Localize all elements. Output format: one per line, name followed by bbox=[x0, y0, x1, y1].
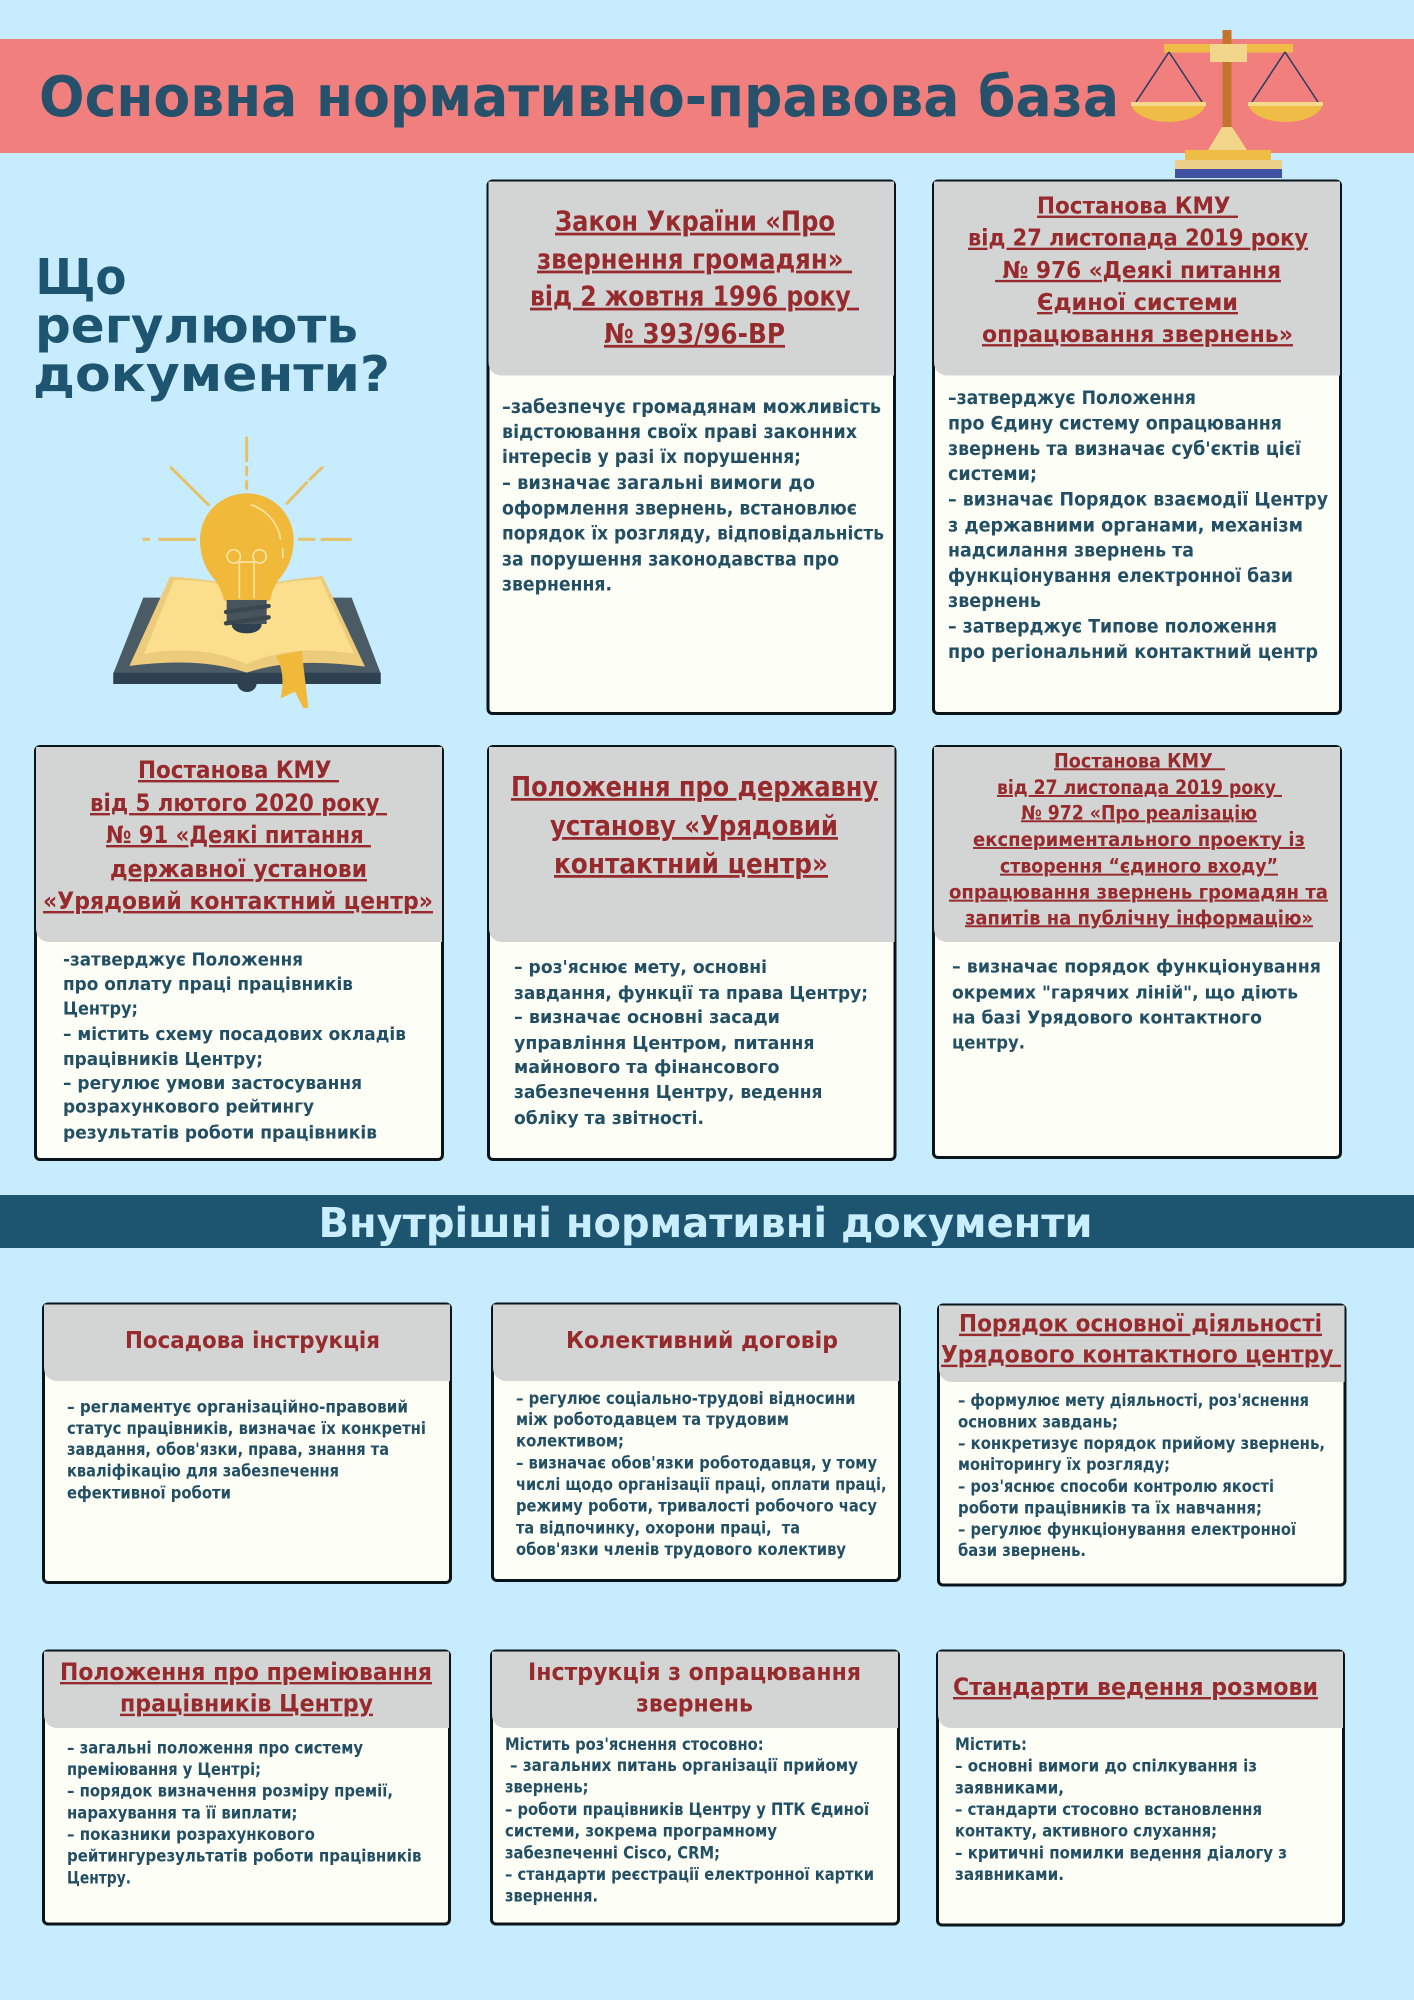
panel: job description bbox=[42, 1302, 452, 1584]
card text bbox=[948, 387, 1329, 663]
card body background bbox=[493, 1652, 897, 1922]
card frame bbox=[42, 1302, 452, 1584]
card frame bbox=[34, 745, 444, 1161]
card frame bbox=[487, 745, 896, 1161]
card text: заявниками, bbox=[955, 1778, 1064, 1797]
card text: звернення. bbox=[505, 1887, 598, 1906]
card text: Центру; bbox=[63, 998, 138, 1019]
card heading bbox=[941, 1310, 1341, 1369]
card body background bbox=[490, 182, 893, 712]
card text bbox=[958, 1391, 1325, 1560]
card heading: від 27 листопада 2019 року bbox=[968, 224, 1308, 252]
card text: – порядок визначення розміру премії, bbox=[67, 1782, 393, 1801]
card text: оформлення звернень, встановлює bbox=[502, 498, 857, 520]
card text: за порушення законодавства про bbox=[502, 548, 839, 570]
card text: бази звернень. bbox=[958, 1541, 1086, 1560]
card heading: Положення про державну bbox=[511, 771, 878, 803]
card heading: від 27 листопада 2019 року bbox=[997, 776, 1282, 799]
card frame bbox=[490, 1650, 900, 1926]
card heading: Посадова інструкція bbox=[125, 1328, 380, 1354]
card heading bbox=[511, 771, 878, 880]
card heading: створення “єдиного входу” bbox=[1000, 855, 1278, 878]
card text: – містить схему посадових окладів bbox=[63, 1024, 406, 1045]
panel: bonus regulation bbox=[42, 1650, 451, 1926]
card text bbox=[63, 950, 406, 1143]
card header bbox=[934, 182, 1340, 376]
panel: appeals processing instruction bbox=[490, 1650, 900, 1926]
card text: – формулює мету діяльності, роз'яснення bbox=[958, 1391, 1309, 1410]
card frame bbox=[486, 180, 896, 715]
card text: – визначає порядок функціонування bbox=[952, 957, 1321, 978]
card heading: «Урядовий контактний центр» bbox=[43, 887, 433, 915]
card heading: державної установи bbox=[110, 855, 367, 883]
card text: –забезпечує громадянам можливість bbox=[502, 396, 881, 418]
card heading: працівників Центру bbox=[120, 1690, 373, 1718]
heading: what do documents regulate: документи? bbox=[33, 346, 390, 403]
card text: рейтингурезультатів роботи працівників bbox=[67, 1847, 422, 1866]
panel: law on citizens' appeals bbox=[486, 180, 896, 715]
card frame bbox=[932, 180, 1342, 715]
card text: – затверджує Типове положення bbox=[948, 616, 1277, 638]
card text: статус працівників, визначає їх конкретні bbox=[67, 1419, 426, 1438]
card body background bbox=[45, 1652, 448, 1922]
card text: – регулює умови застосування bbox=[63, 1073, 362, 1094]
card heading: Закон України «Про bbox=[555, 206, 835, 238]
card text: – роз'яснює способи контролю якості bbox=[958, 1477, 1274, 1496]
card text: окремих "гарячих ліній", що діють bbox=[952, 982, 1298, 1003]
card heading: Порядок основної діяльності bbox=[959, 1310, 1322, 1338]
card header bbox=[939, 1306, 1344, 1382]
card header bbox=[492, 1652, 898, 1728]
card text bbox=[516, 1389, 886, 1559]
card text: порядок їх розгляду, відповідальність bbox=[502, 523, 884, 545]
card text bbox=[67, 1738, 422, 1887]
card header bbox=[938, 1652, 1343, 1728]
card heading: звернень bbox=[636, 1690, 753, 1718]
card heading: № 91 «Деякі питання bbox=[106, 821, 371, 849]
card text: числі щодо організації праці, оплати праці, bbox=[516, 1475, 886, 1494]
card text: – регламентує організаційно-правовий bbox=[67, 1397, 408, 1416]
card text: -затверджує Положення bbox=[63, 950, 303, 971]
card heading: № 976 «Деякі питання bbox=[995, 256, 1281, 284]
card frame bbox=[937, 1304, 1346, 1586]
panel: resolution 91 bbox=[34, 745, 444, 1161]
card text: – критичні помилки ведення діалогу з bbox=[955, 1843, 1287, 1862]
card body background bbox=[935, 748, 1339, 1156]
card text: системи; bbox=[948, 463, 1037, 485]
card text: відстоювання своїх праві законних bbox=[502, 421, 857, 443]
card text: про регіональний контактний центр bbox=[948, 641, 1318, 663]
card text: моніторингу їх розгляду; bbox=[958, 1455, 1170, 1474]
card text: про Єдину систему опрацювання bbox=[948, 413, 1282, 435]
card text: обліку та звітності. bbox=[514, 1108, 704, 1129]
card heading: Колективний договір bbox=[566, 1328, 838, 1354]
card frame bbox=[936, 1650, 1345, 1926]
card text bbox=[952, 957, 1321, 1053]
card text: обов'язки членів трудового колективу bbox=[516, 1540, 846, 1559]
panel: conversation standards bbox=[936, 1650, 1345, 1926]
card text: Містить: bbox=[955, 1735, 1027, 1754]
card body background bbox=[939, 1652, 1342, 1924]
card heading: Постанова КМУ bbox=[138, 756, 339, 784]
card text: надсилання звернень та bbox=[948, 539, 1194, 561]
card body background bbox=[45, 1306, 449, 1581]
card text: нарахування та її виплати; bbox=[67, 1803, 298, 1822]
card heading: Урядового контактного центру bbox=[941, 1341, 1341, 1369]
card text: між роботодавцем та трудовим bbox=[516, 1410, 789, 1429]
card heading: від 5 лютого 2020 року bbox=[90, 789, 387, 817]
card text: звернень; bbox=[505, 1778, 588, 1797]
panel: regulation on the government contact centre bbox=[487, 745, 896, 1161]
card heading: від 2 жовтня 1996 року bbox=[530, 281, 859, 313]
card heading bbox=[949, 749, 1328, 929]
heading: what do documents regulate: Що bbox=[36, 249, 126, 306]
card text: ефективної роботи bbox=[67, 1483, 231, 1502]
card text: – загальних питань організації прийому bbox=[510, 1756, 858, 1775]
card text: – стандарти реєстрації електронної картки bbox=[505, 1865, 874, 1884]
card text: з державними органами, механізм bbox=[948, 514, 1303, 536]
card text: забезпеченні Cisco, CRM; bbox=[505, 1843, 720, 1862]
card text: – регулює функціонування електронної bbox=[958, 1520, 1296, 1539]
card body background bbox=[37, 748, 441, 1158]
card text: кваліфікацію для забезпечення bbox=[67, 1462, 339, 1481]
card body background bbox=[494, 1306, 898, 1579]
card text: розрахункового рейтингу bbox=[63, 1097, 314, 1118]
card heading: Постанова КМУ bbox=[1037, 192, 1238, 220]
card text: Містить роз'яснення стосовно: bbox=[505, 1735, 764, 1754]
card text: – стандарти стосовно встановлення bbox=[955, 1800, 1262, 1819]
card frame bbox=[491, 1302, 901, 1582]
card heading: Інструкція з опрацювання bbox=[528, 1658, 861, 1686]
panel: resolution 976 bbox=[932, 180, 1342, 715]
card heading: опрацювання звернень громадян та bbox=[949, 881, 1328, 904]
heading: what do documents regulate bbox=[33, 249, 390, 403]
card header bbox=[44, 1652, 449, 1728]
heading: what do documents regulate: регулюють bbox=[35, 298, 358, 355]
card heading bbox=[60, 1658, 432, 1718]
panel: main activity procedure bbox=[937, 1304, 1346, 1586]
icon: light bulb over open book bbox=[113, 438, 381, 708]
card text: преміювання у Центрі; bbox=[67, 1760, 261, 1779]
card text: колективом; bbox=[516, 1432, 624, 1451]
panel: resolution 972 bbox=[932, 745, 1342, 1159]
card text: та відпочинку, охорони праці, та bbox=[516, 1518, 800, 1537]
card heading: звернення громадян» bbox=[537, 244, 852, 276]
card text: звернень bbox=[948, 590, 1041, 612]
title banner bbox=[0, 39, 1414, 153]
card text: завдання, функції та права Центру; bbox=[514, 983, 868, 1004]
card heading: Постанова КМУ bbox=[1054, 749, 1225, 772]
card text: – регулює соціально-трудові відносини bbox=[516, 1389, 856, 1408]
card text: на базі Урядового контактного bbox=[952, 1007, 1262, 1028]
card header bbox=[36, 747, 442, 942]
card text: – визначає загальні вимоги до bbox=[502, 472, 815, 494]
card heading: опрацювання звернень» bbox=[982, 320, 1293, 348]
card text bbox=[505, 1735, 874, 1906]
card body background bbox=[935, 182, 1339, 712]
card text bbox=[955, 1735, 1287, 1884]
card text bbox=[514, 957, 868, 1129]
card text: основних завдань; bbox=[958, 1412, 1118, 1431]
card text: – конкретизує порядок прийому звернень, bbox=[958, 1434, 1325, 1453]
card text: – визначає основні засади bbox=[514, 1007, 780, 1028]
card text: системи, зокрема програмному bbox=[505, 1822, 777, 1841]
card text: контакту, активного слухання; bbox=[955, 1822, 1217, 1841]
card text: – визначає Порядок взаємодії Центру bbox=[948, 489, 1329, 511]
card text: про оплату праці працівників bbox=[63, 974, 353, 995]
card text: роботи працівників та їх навчання; bbox=[958, 1498, 1262, 1517]
card text: забезпечення Центру, ведення bbox=[514, 1082, 822, 1103]
card header bbox=[934, 747, 1340, 942]
card heading: установу «Урядовий bbox=[550, 810, 838, 842]
card text: Центру. bbox=[67, 1868, 131, 1887]
card heading bbox=[530, 206, 859, 350]
card header bbox=[489, 747, 894, 942]
card text: результатів роботи працівників bbox=[63, 1122, 377, 1143]
card text: управління Центром, питання bbox=[514, 1033, 814, 1054]
card text: звернення. bbox=[502, 573, 612, 595]
card heading bbox=[528, 1658, 861, 1718]
card text: інтересів у разі їх порушення; bbox=[502, 446, 801, 468]
card heading: Стандарти ведення розмови bbox=[953, 1673, 1318, 1701]
card text: – загальні положення про систему bbox=[67, 1738, 363, 1757]
card text: майнового та фінансового bbox=[514, 1057, 780, 1078]
card text: –затверджує Положення bbox=[948, 387, 1196, 409]
card heading bbox=[43, 756, 433, 915]
card heading bbox=[968, 192, 1308, 348]
section banner bbox=[0, 1195, 1414, 1248]
card text: заявниками. bbox=[955, 1865, 1064, 1884]
card heading: контактний центр» bbox=[554, 848, 828, 880]
card frame bbox=[42, 1650, 451, 1926]
card text: звернень та визначає суб'єктів цієї bbox=[948, 438, 1301, 460]
card header bbox=[493, 1304, 899, 1381]
card text bbox=[502, 396, 884, 595]
card text bbox=[67, 1397, 426, 1502]
card body background bbox=[940, 1306, 1344, 1584]
card text: режиму роботи, тривалості робочого часу bbox=[516, 1497, 877, 1516]
card heading: Єдиної системи bbox=[1037, 288, 1238, 316]
card frame bbox=[932, 745, 1342, 1159]
section heading: Внутрішні нормативні документи bbox=[318, 1199, 1092, 1247]
card text: завдання, обов'язки, права, знання та bbox=[67, 1440, 389, 1459]
card text: – роботи працівників Центру у ПТК Єдиної bbox=[505, 1800, 869, 1819]
card heading: № 972 «Про реалізацію bbox=[1021, 801, 1257, 824]
card text: центру. bbox=[952, 1032, 1025, 1053]
card heading: Положення про преміювання bbox=[60, 1658, 432, 1686]
card text: працівників Центру; bbox=[63, 1049, 263, 1070]
card text: – основні вимоги до спілкування із bbox=[955, 1757, 1257, 1776]
card text: – показники розрахункового bbox=[67, 1825, 315, 1844]
card heading: запитів на публічну інформацію» bbox=[965, 906, 1313, 929]
card heading: експериментального проекту із bbox=[973, 828, 1305, 851]
title: Основна нормативно-правова база bbox=[39, 65, 1119, 130]
card text: функціонування електронної бази bbox=[948, 565, 1293, 587]
card header bbox=[488, 182, 894, 376]
card body background bbox=[490, 748, 894, 1158]
card header bbox=[44, 1304, 450, 1381]
panel: collective agreement bbox=[491, 1302, 901, 1582]
icon: scales of justice bbox=[1131, 30, 1323, 178]
card text: – роз'яснює мету, основні bbox=[514, 957, 767, 978]
card heading: № 393/96-ВР bbox=[604, 318, 785, 350]
card text: – визначає обов'язки роботодавця, у тому bbox=[516, 1453, 877, 1472]
